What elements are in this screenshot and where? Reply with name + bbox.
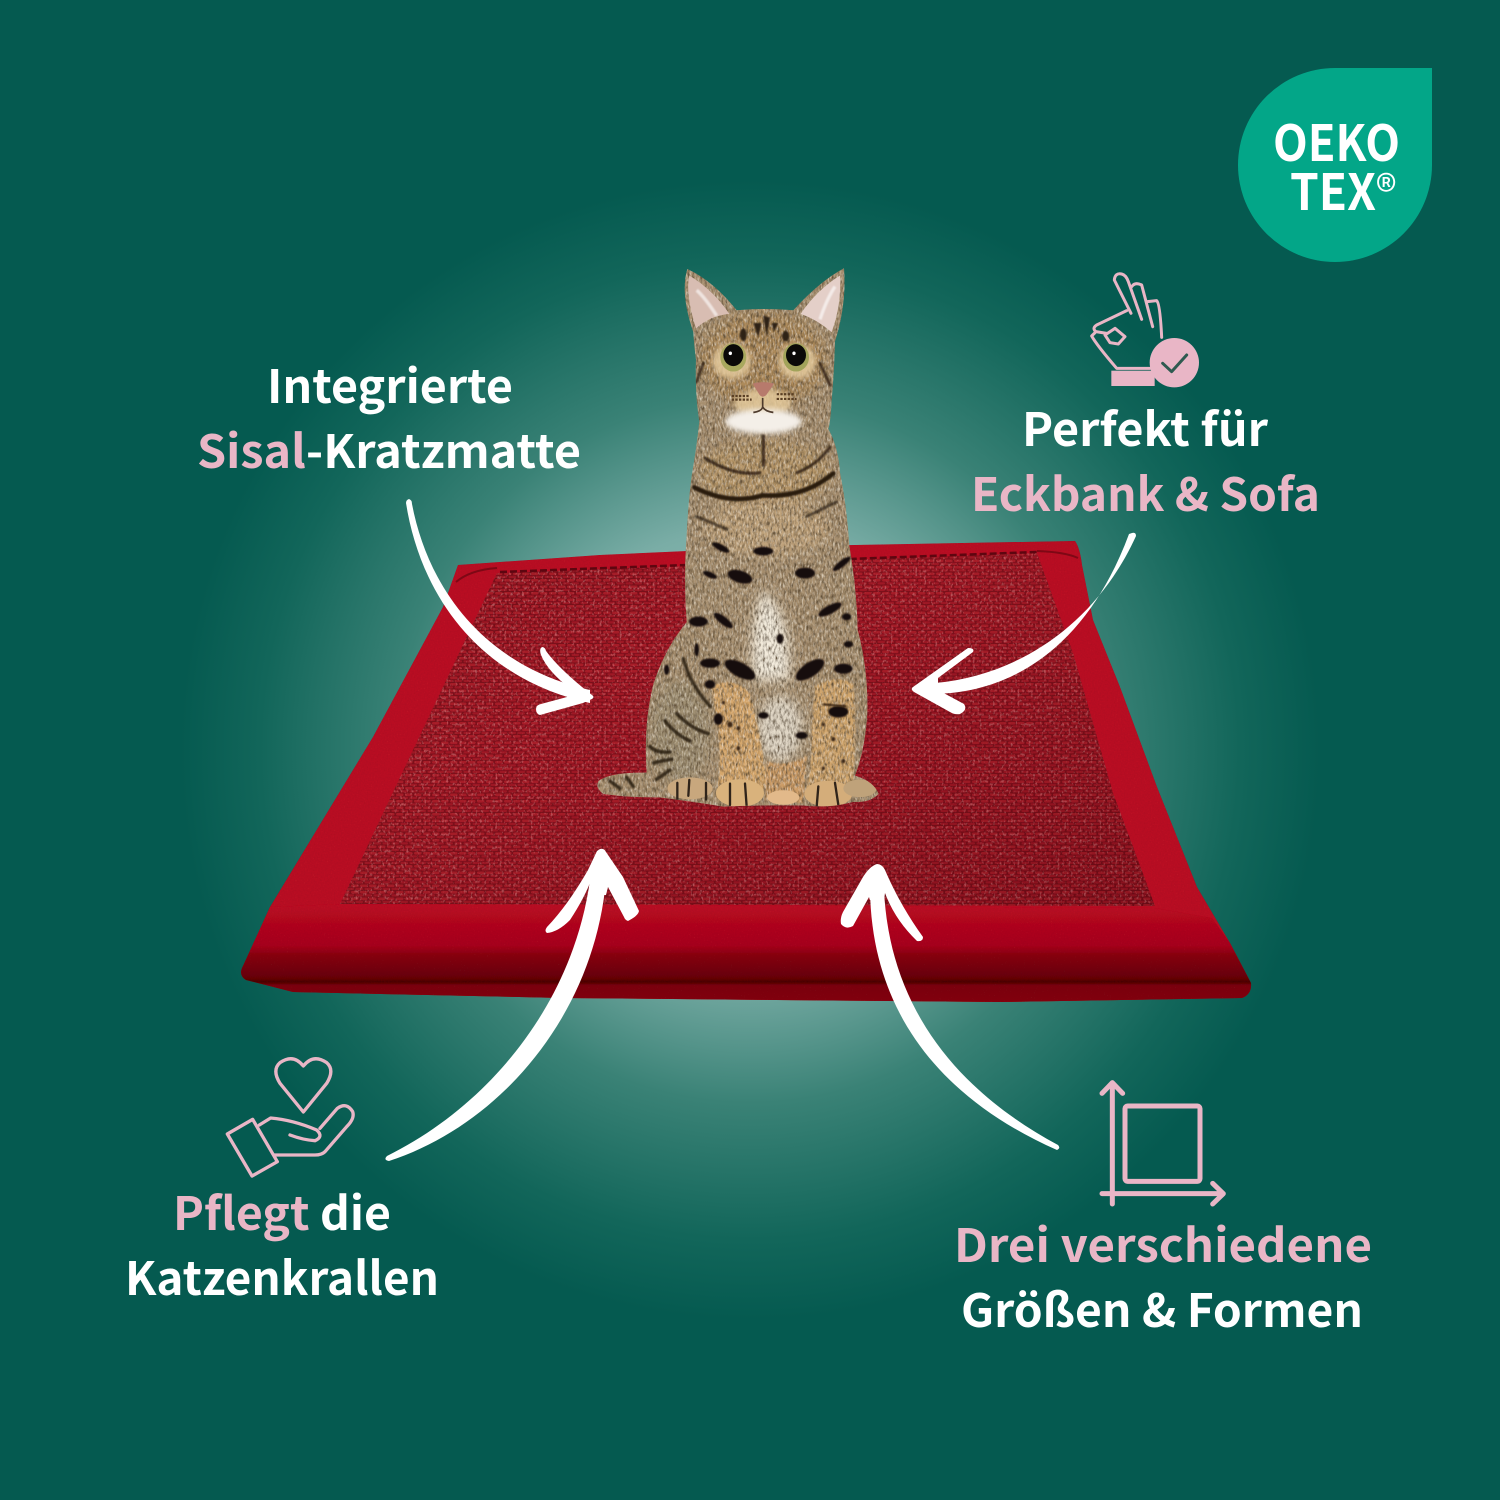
cat paws <box>667 777 877 807</box>
icon: hand holding heart <box>227 1059 353 1176</box>
heading: Integrierte Sisal-Kratzmatte <box>197 351 581 482</box>
cat head and chest warm tones <box>650 312 832 783</box>
icon: dimensions square with axes <box>1102 1083 1223 1204</box>
cat muzzle <box>725 394 802 434</box>
heading: Pflegt die Katzenkrallen: Pflegt die <box>173 1178 391 1244</box>
cat eyes <box>720 343 809 372</box>
sisal scratching mat <box>241 541 1251 1002</box>
arrow: bottom-left label to mat <box>385 849 639 1161</box>
badge: OEKO TEX drop: TEX <box>1290 153 1376 225</box>
cat ears <box>688 276 840 332</box>
cat stripes <box>694 363 837 529</box>
cat leg speckles <box>722 701 847 770</box>
cat photo illustration <box>597 268 879 807</box>
badge: OEKO TEX drop: ® <box>1376 158 1396 220</box>
badge: OEKO TEX drop: OEKO <box>1273 104 1400 176</box>
mat corner seams <box>456 551 1078 582</box>
heading: Drei verschiedene Größen & Formen: Drei verschiedene <box>954 1210 1372 1276</box>
cat front legs <box>712 679 855 803</box>
cat forehead marks <box>740 316 789 341</box>
heading: Pflegt die Katzenkrallen <box>125 1178 439 1309</box>
heading: Drei verschiedene Größen & Formen <box>954 1210 1372 1341</box>
heading: Integrierte Sisal-Kratzmatte: Sisal-Kratzmatte <box>197 416 581 482</box>
heading: Integrierte Sisal-Kratzmatte: Integrierte <box>267 351 513 417</box>
arrow: top-right label to mat <box>912 533 1136 714</box>
icon: ok hand with check <box>1092 274 1199 387</box>
cat haunch stripes <box>610 659 710 788</box>
cat eye surrounds <box>712 344 816 418</box>
heading: Perfekt für Eckbank & Sofa: Perfekt für <box>1022 394 1269 460</box>
arrow: bottom-right label to mat <box>841 864 1059 1150</box>
heading: Perfekt für Eckbank & Sofa: Eckbank & Sofa <box>971 459 1320 525</box>
badge: OEKO TEX drop <box>1238 68 1432 262</box>
mat sisal surface <box>340 553 1155 906</box>
cat silhouette <box>597 268 879 807</box>
mat shading on sisal <box>340 553 1155 906</box>
mat top stitching <box>500 552 1037 572</box>
mat outer binding <box>241 541 1251 1002</box>
heading: Perfekt für Eckbank & Sofa <box>971 394 1320 525</box>
heading: Pflegt die Katzenkrallen: Katzenkrallen <box>125 1243 439 1309</box>
arrow: top-left label to mat <box>406 499 594 715</box>
mat front band <box>241 904 1251 1002</box>
cat nose <box>753 382 774 397</box>
heading: Drei verschiedene Größen & Formen: Größen & Formen <box>961 1275 1363 1341</box>
cat fur spots <box>664 540 853 739</box>
